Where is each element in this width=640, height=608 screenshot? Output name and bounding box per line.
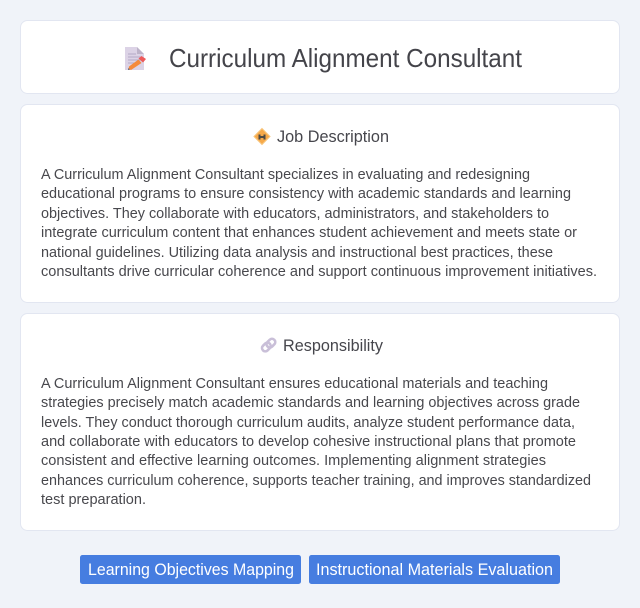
heading: job description: Job Description — [277, 127, 389, 146]
text block: responsibility: A Curriculum Alignment Consultant ensures educational materials and teaching — [41, 376, 548, 392]
text block: job description: integrate curriculum content that enhances student achievement and meets state or — [41, 225, 577, 241]
text block: job description: educational programs to ensure consistency with academic standards and learning — [41, 186, 571, 202]
tag: instructional materials evaluation: Instructional Materials Evaluation — [316, 561, 553, 579]
text block: responsibility — [41, 376, 591, 508]
tag: instructional materials evaluation — [309, 555, 560, 584]
panel: header — [20, 20, 620, 94]
text block: job description: objectives. They collaborate with educators, administrators, and stakeholders to — [41, 206, 549, 222]
panel: job description — [20, 104, 620, 302]
heading: responsibility: Responsibility — [283, 336, 384, 355]
icon: document with pencil — [125, 47, 146, 70]
tag: learning objectives mapping: Learning Objectives Mapping — [88, 561, 294, 579]
tag: learning objectives mapping — [80, 555, 301, 584]
text block: job description: A Curriculum Alignment Consultant specializes in evaluating and redesigning — [41, 167, 530, 183]
icon: diamond road sign — [254, 128, 270, 144]
text block: responsibility: strategies precisely match academic standards and learning objectives across grade — [41, 395, 580, 411]
text block: responsibility: and collaborate with educators to develop cohesive instructional plans that promote — [41, 434, 576, 450]
text block: responsibility: test preparation. — [41, 492, 146, 508]
text block: job description: national guidelines. Utilizing data analysis and instructional best practices, these — [41, 245, 553, 261]
title: Curriculum Alignment Consultant — [169, 43, 523, 73]
text block: responsibility: levels. They conduct thorough curriculum audits, analyze student performance data, — [41, 415, 575, 431]
icon: chain link — [261, 337, 277, 353]
panel: responsibility — [20, 314, 620, 530]
text block: responsibility: enhances curriculum coherence, supports teacher training, and improves standardized — [41, 473, 591, 489]
text block: responsibility: consistent and effective learning outcomes. Implementing alignment strategies — [41, 453, 546, 469]
text block: job description — [41, 167, 597, 280]
text block: job description: consultants drive curricular coherence and support continuous improvement initiatives. — [41, 264, 597, 280]
